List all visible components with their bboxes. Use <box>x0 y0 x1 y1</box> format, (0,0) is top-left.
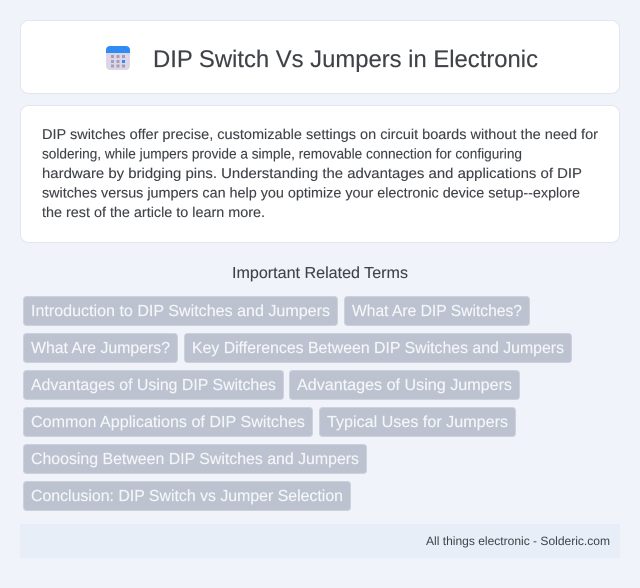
title: DIP Switch Vs Jumpers in Electronic <box>153 46 538 73</box>
chip: key differences <box>184 334 572 362</box>
text block: intro paragraph: hardware by bridging pins. Understanding the advantages and applications of DIP <box>42 166 582 182</box>
chip: what are DIP switches: What Are DIP Switches? <box>352 303 522 320</box>
chip: advantages of jumpers <box>290 370 520 400</box>
heading: related terms: Important Related Terms <box>232 265 408 282</box>
chip: choosing between <box>24 444 366 474</box>
chip: advantages of DIP switches <box>24 370 284 400</box>
chip: what are DIP switches <box>344 296 530 326</box>
text block: intro paragraph: DIP switches offer precise, customizable settings on circuit boards without the need for <box>42 127 598 143</box>
related term chips <box>24 296 572 510</box>
chip: introduction: Introduction to DIP Switches and Jumpers <box>31 303 330 320</box>
footer credit: All things electronic - Solderic.com <box>426 534 610 548</box>
text block: intro paragraph: soldering, while jumpers provide a simple, removable connection for configuring <box>42 146 522 162</box>
chip: common applications <box>24 408 312 436</box>
chip: conclusion <box>24 482 350 510</box>
header panel <box>20 20 620 94</box>
chip: common applications: Common Applications of DIP Switches <box>31 414 305 431</box>
icon: calendar grid <box>106 46 130 70</box>
chip: advantages of DIP switches: Advantages of Using DIP Switches <box>31 377 276 394</box>
chip: choosing between: Choosing Between DIP Switches and Jumpers <box>31 451 359 468</box>
text block: intro paragraph <box>42 127 598 221</box>
footer <box>20 524 620 558</box>
chip: conclusion: Conclusion: DIP Switch vs Jumper Selection <box>31 488 343 505</box>
chip: introduction <box>24 296 338 326</box>
chip: typical uses <box>320 408 516 436</box>
chip: key differences: Key Differences Between DIP Switches and Jumpers <box>192 340 564 357</box>
chip: typical uses: Typical Uses for Jumpers <box>327 414 508 431</box>
text block: intro paragraph: switches versus jumpers can help you optimize your electronic device setup--explore <box>42 186 580 202</box>
chip: what are jumpers <box>24 334 178 362</box>
chip: advantages of jumpers: Advantages of Using Jumpers <box>297 377 512 394</box>
text block: intro paragraph: the rest of the article to learn more. <box>42 205 265 221</box>
chip: what are jumpers: What Are Jumpers? <box>31 340 170 357</box>
panel: intro text <box>20 106 620 242</box>
